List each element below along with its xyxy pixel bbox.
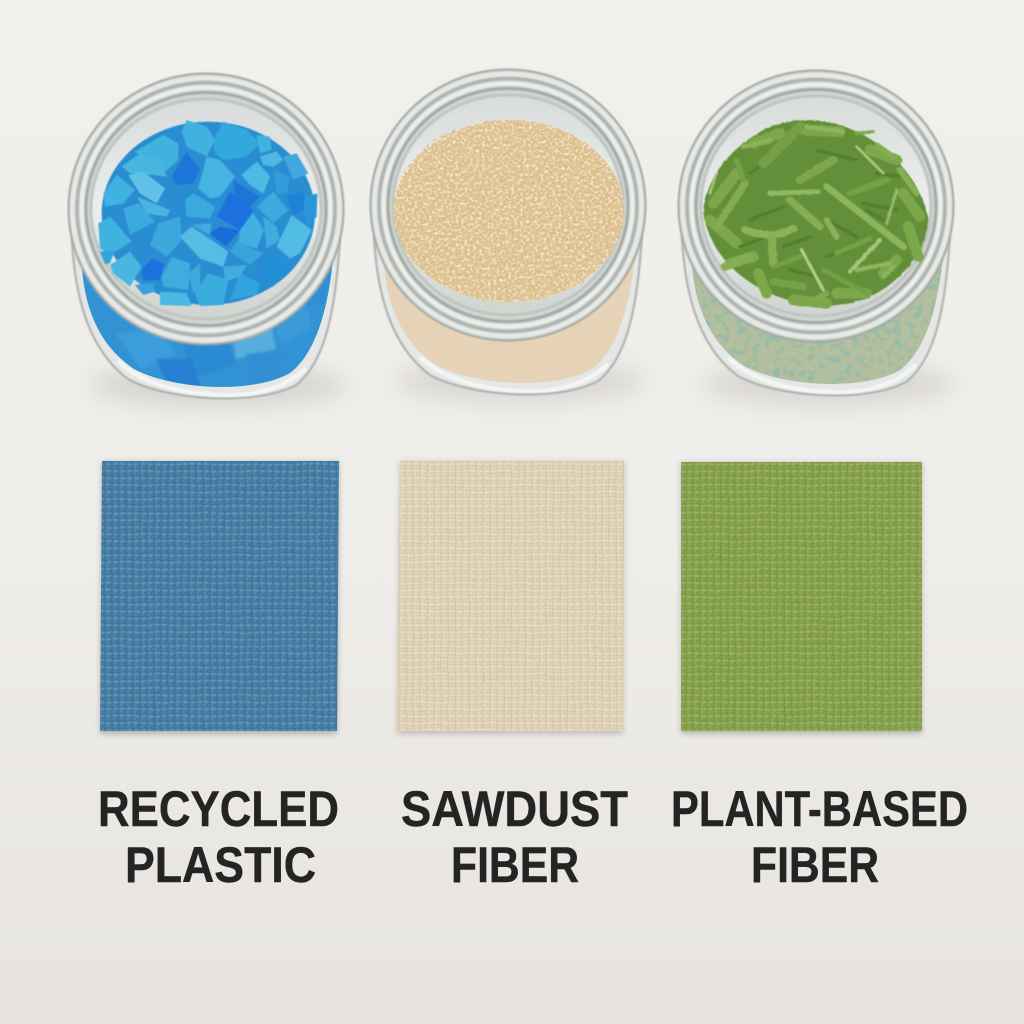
pellets on top	[98, 120, 317, 306]
sawdust surface	[394, 120, 624, 302]
label: sawdust fiber: SAWDUST	[401, 781, 628, 837]
swatch: green fabric	[681, 462, 922, 734]
label: plant-based fiber	[671, 781, 968, 893]
jar: plant fiber	[678, 70, 954, 406]
fiber seen through the jar wall	[692, 260, 942, 384]
label: plant-based fiber: PLANT-BASED	[671, 781, 968, 837]
label: recycled plastic	[98, 781, 339, 893]
swatch: beige fabric	[397, 461, 624, 734]
label: recycled plastic: RECYCLED	[98, 781, 339, 837]
sawdust seen through the jar wall	[384, 260, 634, 383]
jar: sawdust	[370, 70, 646, 403]
label: sawdust fiber: FIBER	[451, 837, 579, 893]
label: recycled plastic: PLASTIC	[125, 837, 316, 893]
fiber strands on top	[703, 120, 928, 306]
label: sawdust fiber	[401, 781, 628, 893]
swatch: blue fabric	[100, 461, 339, 734]
jar: recycled plastic pellets	[68, 74, 346, 407]
label: plant-based fiber: FIBER	[751, 837, 879, 893]
pellets seen through the jar wall	[82, 262, 333, 387]
